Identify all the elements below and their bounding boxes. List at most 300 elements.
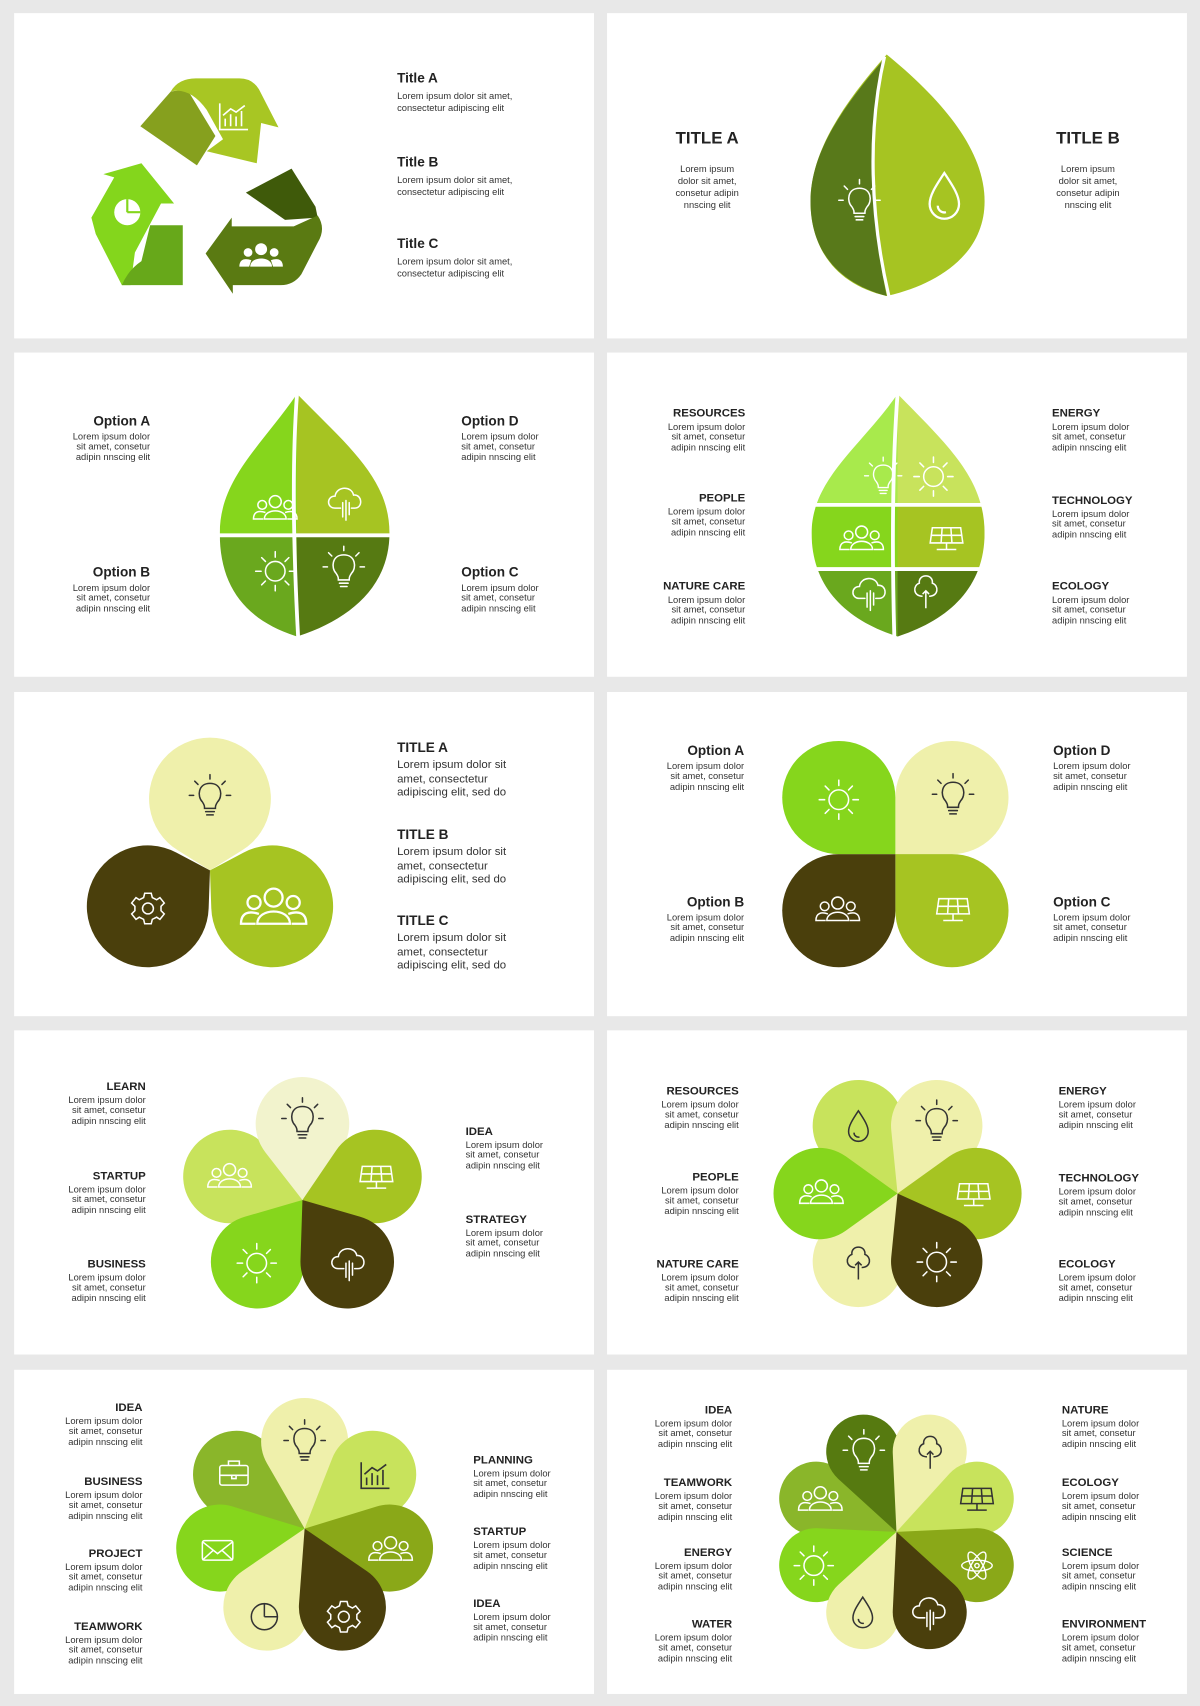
- text: IDEA: Lorem ipsum dolor: [466, 1140, 543, 1150]
- text: Option C: adipin nnscing elit: [461, 603, 536, 613]
- text: TITLE A: nnscing elit: [684, 200, 731, 210]
- text: TECHNOLOGY: sit amet, consetur: [1059, 1196, 1132, 1206]
- text: STARTUP: sit amet, consetur: [473, 1550, 547, 1560]
- text: TITLE A: Lorem ipsum dolor sit: [397, 759, 507, 771]
- text: Option C: sit amet, consetur: [1053, 922, 1127, 932]
- icon: bulb: [932, 774, 974, 814]
- text: IDEA: sit amet, consetur: [69, 1426, 143, 1436]
- text: Option B: sit amet, consetur: [670, 922, 744, 932]
- text: TITLE B: amet, consectetur: [397, 860, 488, 872]
- text: STARTUP: [68, 1170, 146, 1215]
- text: Option B: Lorem ipsum dolor: [73, 583, 150, 593]
- icon: tree: [919, 1436, 941, 1469]
- text: ECOLOGY: Lorem ipsum dolor: [1062, 1491, 1139, 1501]
- text: ENERGY: ENERGY: [1059, 1086, 1107, 1098]
- text: Option B: [73, 565, 151, 613]
- text: TITLE B: dolor sit amet,: [1059, 176, 1117, 186]
- text: IDEA: IDEA: [115, 1402, 143, 1414]
- text: RESOURCES: sit amet, consetur: [665, 1109, 739, 1119]
- text: TECHNOLOGY: Lorem ipsum dolor: [1052, 509, 1129, 519]
- text: ENERGY: sit amet, consetur: [658, 1571, 732, 1581]
- icon: pie: [114, 199, 140, 225]
- text: Option D: Option D: [1053, 743, 1111, 758]
- text: PROJECT: [65, 1548, 143, 1593]
- panel: six-part drop: [607, 353, 1187, 677]
- text: Option A: sit amet, consetur: [670, 771, 744, 781]
- text: IDEA: sit amet, consetur: [658, 1428, 732, 1438]
- text: STARTUP: STARTUP: [93, 1170, 146, 1182]
- text: TEAMWORK: [65, 1621, 143, 1666]
- text: Title C: Title C: [397, 236, 439, 251]
- text: BUSINESS: BUSINESS: [87, 1259, 146, 1271]
- text: WATER: [655, 1619, 733, 1663]
- text: ENVIRONMENT: adipin nnscing elit: [1062, 1653, 1137, 1663]
- text: BUSINESS: adipin nnscing elit: [72, 1293, 146, 1303]
- icon: bulb: [284, 1420, 325, 1460]
- text: Option C: Lorem ipsum dolor: [1053, 912, 1131, 922]
- petal chart: [65, 738, 355, 990]
- text: IDEA: IDEA: [466, 1126, 493, 1138]
- leaf shape: [811, 54, 985, 296]
- text: ECOLOGY: sit amet, consetur: [1062, 1501, 1136, 1511]
- panel: four-part drop: [14, 353, 594, 677]
- text: Title A: Title A: [397, 71, 438, 86]
- text: BUSINESS: BUSINESS: [84, 1476, 143, 1488]
- text: STARTUP: Lorem ipsum dolor: [473, 1540, 551, 1550]
- text: Option B: adipin nnscing elit: [670, 933, 745, 943]
- text: ENERGY: Lorem ipsum dolor: [1052, 422, 1129, 432]
- text: BUSINESS: [68, 1259, 146, 1303]
- text: TITLE A: adipiscing elit, sed do: [397, 786, 506, 798]
- text: PLANNING: Lorem ipsum dolor: [473, 1468, 551, 1478]
- text: NATURE CARE: sit amet, consetur: [665, 1282, 739, 1292]
- text: Option D: Lorem ipsum dolor: [461, 432, 539, 442]
- text: PLANNING: PLANNING: [473, 1454, 533, 1466]
- text: STARTUP: adipin nnscing elit: [72, 1205, 146, 1215]
- text: RESOURCES: RESOURCES: [666, 1086, 739, 1098]
- text: IDEA: adipin nnscing elit: [466, 1161, 540, 1171]
- icon: solar: [961, 1488, 993, 1510]
- text: Title A: consectetur adipiscing elit: [397, 103, 504, 113]
- text: Option A: Lorem ipsum dolor: [73, 432, 150, 442]
- panel: four petals: [607, 692, 1187, 1016]
- icon: bulb: [865, 457, 902, 493]
- text: ECOLOGY: [1059, 1259, 1136, 1303]
- text: Option B: Option B: [93, 565, 150, 580]
- text: ECOLOGY: [1052, 581, 1129, 625]
- text: IDEA: [655, 1404, 733, 1449]
- text: TITLE A: TITLE A: [397, 740, 448, 755]
- text: STRATEGY: sit amet, consetur: [466, 1238, 539, 1248]
- text: ENVIRONMENT: sit amet, consetur: [1062, 1642, 1136, 1652]
- text: ECOLOGY: Lorem ipsum dolor: [1052, 595, 1129, 605]
- text: NATURE CARE: NATURE CARE: [657, 1259, 739, 1271]
- petal chart: [768, 1403, 1025, 1661]
- text: TECHNOLOGY: [1059, 1173, 1139, 1217]
- panel: three petals: [14, 692, 594, 1016]
- text: TECHNOLOGY: TECHNOLOGY: [1059, 1173, 1139, 1185]
- icon: bulb: [916, 1100, 957, 1140]
- text: WATER: sit amet, consetur: [658, 1642, 732, 1652]
- text: LEARN: LEARN: [106, 1081, 146, 1093]
- text: NATURE: sit amet, consetur: [1062, 1428, 1136, 1438]
- text: RESOURCES: adipin nnscing elit: [664, 1120, 739, 1130]
- text: TITLE B: Lorem ipsum: [1061, 164, 1115, 174]
- text: NATURE: adipin nnscing elit: [1062, 1439, 1137, 1449]
- text: IDEA: [466, 1126, 543, 1171]
- text: BUSINESS: Lorem ipsum dolor: [65, 1490, 143, 1500]
- text: Option C: [461, 565, 539, 613]
- icon: solar: [937, 899, 969, 920]
- text: NATURE CARE: [663, 581, 746, 625]
- text: Title B: Lorem ipsum dolor sit amet,: [397, 175, 512, 185]
- text: ENERGY: Lorem ipsum dolor: [655, 1561, 732, 1571]
- text: ENERGY: ENERGY: [1052, 408, 1101, 420]
- icon: chart: [220, 103, 248, 130]
- icon: people: [369, 1537, 412, 1560]
- icon: sun: [256, 552, 295, 591]
- text: Option D: sit amet, consetur: [1053, 771, 1127, 781]
- icon: people: [239, 243, 283, 267]
- text: SCIENCE: [1062, 1547, 1139, 1592]
- petal chart: [774, 1063, 1022, 1324]
- text: IDEA: IDEA: [705, 1404, 732, 1416]
- text: TEAMWORK: adipin nnscing elit: [68, 1656, 143, 1666]
- icon: solar: [930, 528, 963, 549]
- icon: people: [208, 1164, 251, 1187]
- text: NATURE: Lorem ipsum dolor: [1062, 1418, 1139, 1428]
- text: Option A: adipin nnscing elit: [670, 782, 745, 792]
- text: STARTUP: [473, 1526, 551, 1571]
- drop chart: [218, 392, 395, 644]
- text: TITLE C: Lorem ipsum dolor sit: [397, 932, 507, 944]
- text: Title B: [397, 155, 512, 197]
- text: Option C: Option C: [1053, 894, 1111, 909]
- panel: six petals: [607, 1030, 1187, 1355]
- text: Option D: [1053, 743, 1131, 792]
- text: TITLE A: TITLE A: [676, 129, 739, 148]
- text: PEOPLE: [668, 493, 746, 537]
- text: Option C: sit amet, consetur: [461, 593, 535, 603]
- text: IDEA: [65, 1402, 143, 1447]
- text: Option A: Option A: [687, 743, 744, 758]
- text: STARTUP: adipin nnscing elit: [473, 1561, 548, 1571]
- text: STARTUP: sit amet, consetur: [72, 1194, 146, 1204]
- text: TITLE B: TITLE B: [1056, 129, 1120, 148]
- text: TITLE B: consetur adipin: [1056, 188, 1120, 198]
- text: RESOURCES: adipin nnscing elit: [671, 442, 746, 452]
- text: TITLE B: adipiscing elit, sed do: [397, 873, 506, 885]
- icon: briefcase: [220, 1461, 248, 1485]
- icon: cloud: [853, 579, 885, 610]
- text: TITLE B: [1056, 129, 1120, 210]
- text: ENERGY: adipin nnscing elit: [1052, 442, 1127, 452]
- petal chart: [168, 1398, 442, 1665]
- text: PEOPLE: adipin nnscing elit: [664, 1206, 739, 1216]
- icon: bulb: [189, 775, 231, 815]
- text: ENERGY: sit amet, consetur: [1052, 432, 1126, 442]
- text: TECHNOLOGY: TECHNOLOGY: [1052, 495, 1133, 507]
- text: LEARN: Lorem ipsum dolor: [68, 1095, 146, 1105]
- text: Title C: consectetur adipiscing elit: [397, 268, 504, 278]
- text: WATER: WATER: [692, 1619, 732, 1631]
- icon: sun: [917, 1242, 956, 1282]
- text: TECHNOLOGY: [1052, 495, 1133, 539]
- text: ECOLOGY: adipin nnscing elit: [1062, 1512, 1137, 1522]
- icon: drop: [930, 173, 959, 219]
- text: TECHNOLOGY: adipin nnscing elit: [1052, 529, 1127, 539]
- text: TITLE C: adipiscing elit, sed do: [397, 959, 506, 971]
- text: STRATEGY: STRATEGY: [466, 1214, 527, 1226]
- icon: bulb: [323, 546, 364, 586]
- text: PEOPLE: adipin nnscing elit: [671, 527, 746, 537]
- text: ECOLOGY: adipin nnscing elit: [1059, 1293, 1133, 1303]
- text: TECHNOLOGY: sit amet, consetur: [1052, 519, 1126, 529]
- text: ENVIRONMENT: [1062, 1619, 1146, 1663]
- text: Option B: sit amet, consetur: [76, 593, 150, 603]
- text: IDEA: adipin nnscing elit: [658, 1439, 733, 1449]
- text: Option C: adipin nnscing elit: [1053, 933, 1128, 943]
- text: Option B: [667, 894, 745, 943]
- text: PLANNING: [473, 1454, 551, 1499]
- text: Option A: [73, 413, 151, 462]
- text: RESOURCES: sit amet, consetur: [671, 432, 745, 442]
- icon: sun: [237, 1244, 276, 1283]
- icon: people: [241, 889, 306, 924]
- text: RESOURCES: [668, 408, 746, 452]
- text: STRATEGY: [466, 1214, 543, 1259]
- icon: pie: [251, 1604, 277, 1630]
- text: NATURE CARE: NATURE CARE: [663, 581, 746, 593]
- text: PEOPLE: PEOPLE: [699, 493, 746, 505]
- icon: solar: [957, 1184, 990, 1205]
- text: Title B: Title B: [397, 155, 439, 170]
- text: TECHNOLOGY: adipin nnscing elit: [1059, 1207, 1133, 1217]
- text: SCIENCE: SCIENCE: [1062, 1547, 1113, 1559]
- text: RESOURCES: Lorem ipsum dolor: [661, 1100, 739, 1110]
- text: ECOLOGY: ECOLOGY: [1062, 1477, 1119, 1489]
- text: ENERGY: ENERGY: [684, 1547, 733, 1559]
- text: STRATEGY: Lorem ipsum dolor: [466, 1228, 543, 1238]
- text: Option D: Option D: [461, 413, 519, 428]
- icon: atom: [962, 1550, 992, 1582]
- text: PEOPLE: Lorem ipsum dolor: [668, 507, 745, 517]
- text: LEARN: adipin nnscing elit: [72, 1116, 146, 1126]
- panel: five petals: [14, 1030, 594, 1355]
- text: TITLE B: Lorem ipsum dolor sit: [397, 846, 507, 858]
- text: IDEA 2: [473, 1598, 551, 1643]
- panel: leaf drop: [607, 13, 1187, 338]
- icon: cloud: [913, 1598, 945, 1630]
- text: NATURE CARE: Lorem ipsum dolor: [661, 1273, 739, 1283]
- panel: eight petals: [607, 1370, 1187, 1694]
- text: ECOLOGY: [1062, 1477, 1139, 1522]
- text: IDEA 2: adipin nnscing elit: [473, 1633, 548, 1643]
- petal chart: [782, 741, 1009, 967]
- text: TITLE C: [397, 913, 507, 971]
- text: Option A: [667, 743, 745, 792]
- text: TITLE A: [675, 129, 739, 210]
- text: TITLE B: [397, 827, 507, 885]
- text: TEAMWORK: sit amet, consetur: [658, 1501, 732, 1511]
- text: TITLE B: nnscing elit: [1065, 200, 1112, 210]
- text: TITLE A: consetur adipin: [675, 188, 739, 198]
- text: ENERGY: sit amet, consetur: [1059, 1109, 1132, 1119]
- text: Option B: Lorem ipsum dolor: [667, 912, 744, 922]
- text: IDEA: adipin nnscing elit: [68, 1437, 143, 1447]
- text: Option C: [1053, 894, 1131, 943]
- text: PEOPLE: [661, 1171, 739, 1216]
- text: PLANNING: sit amet, consetur: [473, 1478, 547, 1488]
- text: Title B: consectetur adipiscing elit: [397, 187, 504, 197]
- icon: people: [800, 1180, 843, 1203]
- text: TEAMWORK: TEAMWORK: [664, 1477, 733, 1489]
- icon: people: [816, 897, 859, 920]
- icon: bulb: [839, 180, 880, 220]
- text: PEOPLE: sit amet, consetur: [665, 1195, 739, 1205]
- text: BUSINESS: adipin nnscing elit: [68, 1511, 143, 1521]
- text: RESOURCES: RESOURCES: [673, 408, 746, 420]
- text: Title C: Lorem ipsum dolor sit amet,: [397, 256, 512, 266]
- text: SCIENCE: Lorem ipsum dolor: [1062, 1561, 1139, 1571]
- text: TEAMWORK: TEAMWORK: [74, 1621, 143, 1633]
- text: Option A: Option A: [93, 413, 150, 428]
- text: Title A: Lorem ipsum dolor sit amet,: [397, 91, 512, 101]
- text: Option D: sit amet, consetur: [461, 441, 535, 451]
- icon: gear: [132, 893, 164, 924]
- text: ECOLOGY: adipin nnscing elit: [1052, 615, 1127, 625]
- icon: chart: [361, 1462, 389, 1488]
- text: NATURE: [1062, 1404, 1139, 1449]
- text: Option C: Lorem ipsum dolor: [461, 583, 539, 593]
- text: TEAMWORK: Lorem ipsum dolor: [655, 1491, 732, 1501]
- text: ENERGY: Lorem ipsum dolor: [1059, 1100, 1136, 1110]
- text: Option A: Lorem ipsum dolor: [667, 761, 744, 771]
- text: NATURE: NATURE: [1062, 1404, 1109, 1416]
- text: Option D: adipin nnscing elit: [1053, 782, 1128, 792]
- text: STARTUP: STARTUP: [473, 1526, 527, 1538]
- text: BUSINESS: sit amet, consetur: [69, 1500, 143, 1510]
- text: ENERGY: [1059, 1086, 1136, 1130]
- icon: people: [799, 1487, 842, 1510]
- text: TITLE A: amet, consectetur: [397, 773, 488, 785]
- icon: cloud: [329, 488, 361, 520]
- text: IDEA 2: sit amet, consetur: [473, 1622, 547, 1632]
- icon: tree: [847, 1247, 869, 1279]
- text: TEAMWORK: adipin nnscing elit: [658, 1512, 733, 1522]
- text: PEOPLE: sit amet, consetur: [671, 516, 745, 526]
- text: BUSINESS: Lorem ipsum dolor: [68, 1273, 146, 1283]
- petal chart: [171, 1077, 434, 1327]
- icon: sun: [914, 457, 953, 496]
- text: Option C: Option C: [461, 565, 519, 580]
- text: TITLE B: TITLE B: [397, 827, 449, 842]
- text: WATER: adipin nnscing elit: [658, 1653, 733, 1663]
- text: PROJECT: adipin nnscing elit: [68, 1583, 143, 1593]
- icon: bulb: [282, 1098, 323, 1138]
- text: IDEA 2: Lorem ipsum dolor: [473, 1612, 551, 1622]
- text: RESOURCES: Lorem ipsum dolor: [668, 422, 745, 432]
- text: PROJECT: PROJECT: [89, 1548, 143, 1560]
- icon: people: [840, 526, 883, 549]
- icon: bulb: [843, 1430, 884, 1470]
- text: PLANNING: adipin nnscing elit: [473, 1489, 548, 1499]
- text: PROJECT: sit amet, consetur: [69, 1572, 143, 1582]
- text: BUSINESS: [65, 1476, 143, 1521]
- panel: recycle: [14, 13, 594, 338]
- text: ECOLOGY: ECOLOGY: [1052, 581, 1109, 593]
- drop chart: [812, 396, 984, 636]
- text: SCIENCE: adipin nnscing elit: [1062, 1582, 1137, 1592]
- text: STARTUP: Lorem ipsum dolor: [68, 1184, 146, 1194]
- text: NATURE CARE: adipin nnscing elit: [664, 1293, 739, 1303]
- text: ECOLOGY: sit amet, consetur: [1052, 605, 1126, 615]
- text: NATURE CARE: Lorem ipsum dolor: [668, 595, 745, 605]
- text: Option A: adipin nnscing elit: [76, 452, 151, 462]
- text: TEAMWORK: Lorem ipsum dolor: [65, 1635, 143, 1645]
- text: ENERGY: [655, 1547, 733, 1592]
- text: RESOURCES: [661, 1086, 739, 1130]
- text: ECOLOGY: Lorem ipsum dolor: [1059, 1273, 1136, 1283]
- text: TEAMWORK: sit amet, consetur: [69, 1645, 143, 1655]
- text: PROJECT: Lorem ipsum dolor: [65, 1562, 143, 1572]
- icon: sun: [819, 780, 858, 819]
- text: NATURE CARE: adipin nnscing elit: [671, 615, 746, 625]
- text: Title A: [397, 71, 512, 113]
- text: Option D: adipin nnscing elit: [461, 452, 536, 462]
- icon: solar: [360, 1166, 393, 1188]
- text: PEOPLE: PEOPLE: [692, 1171, 739, 1183]
- panel: seven petals: [14, 1370, 594, 1694]
- text: IDEA: sit amet, consetur: [466, 1150, 539, 1160]
- text: BUSINESS: sit amet, consetur: [72, 1282, 146, 1292]
- icon: mail: [202, 1541, 233, 1560]
- text: ECOLOGY: ECOLOGY: [1059, 1259, 1116, 1271]
- icon: tree: [915, 576, 937, 608]
- icon: people: [253, 496, 297, 519]
- recycle arrows: [91, 78, 322, 294]
- text: ENERGY: [1052, 408, 1129, 452]
- icon: sun: [794, 1546, 833, 1585]
- text: NATURE CARE: [657, 1259, 739, 1303]
- text: PEOPLE: Lorem ipsum dolor: [661, 1186, 739, 1196]
- text: TITLE A: Lorem ipsum: [680, 164, 734, 174]
- text: ECOLOGY: sit amet, consetur: [1059, 1282, 1132, 1292]
- text: LEARN: sit amet, consetur: [72, 1105, 146, 1115]
- text: TITLE C: amet, consectetur: [397, 946, 488, 958]
- text: WATER: Lorem ipsum dolor: [655, 1633, 732, 1643]
- text: Option B: Option B: [687, 894, 744, 909]
- icon: gear: [327, 1602, 360, 1632]
- icon: drop: [853, 1597, 873, 1628]
- text: TITLE A: dolor sit amet,: [678, 176, 737, 186]
- text: Title C: [397, 236, 512, 278]
- text: IDEA 2: IDEA: [473, 1598, 501, 1610]
- icon: drop: [849, 1111, 868, 1141]
- text: TITLE A: [397, 740, 507, 798]
- text: TECHNOLOGY: Lorem ipsum dolor: [1059, 1187, 1136, 1197]
- icon: cloud: [332, 1249, 364, 1281]
- text: Option B: adipin nnscing elit: [76, 603, 151, 613]
- text: Option D: [461, 413, 539, 462]
- text: TITLE C: TITLE C: [397, 913, 449, 928]
- text: SCIENCE: sit amet, consetur: [1062, 1571, 1136, 1581]
- text: ENVIRONMENT: Lorem ipsum dolor: [1062, 1633, 1139, 1643]
- text: TEAMWORK: [655, 1477, 733, 1522]
- text: STRATEGY: adipin nnscing elit: [466, 1249, 540, 1259]
- text: ENVIRONMENT: ENVIRONMENT: [1062, 1619, 1146, 1631]
- text: IDEA: Lorem ipsum dolor: [655, 1418, 732, 1428]
